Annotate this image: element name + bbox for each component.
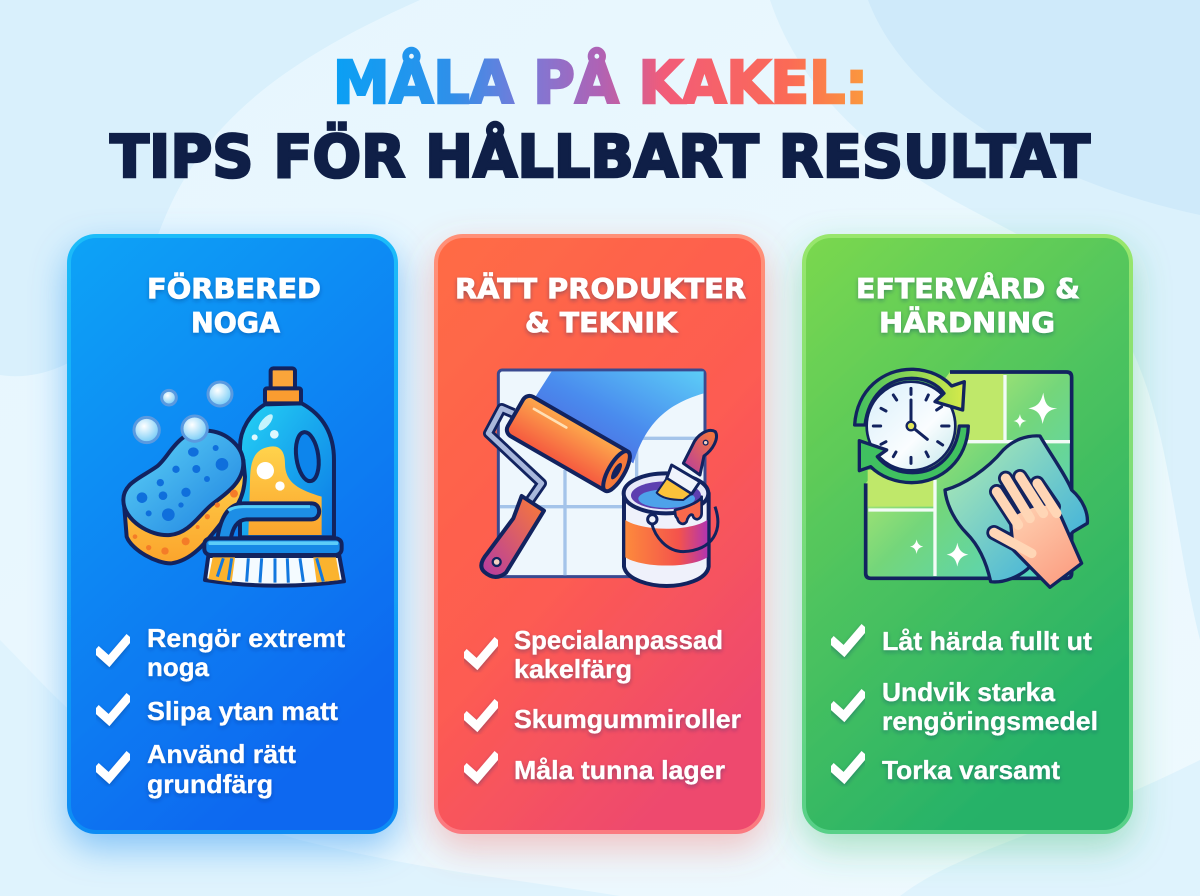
check item 1: Specialanpassad [514, 625, 723, 655]
check item 2: Slipa ytan matt [147, 696, 338, 726]
icon: roller, tile and paint can [481, 370, 718, 586]
icon part: clock [855, 369, 968, 483]
check item 2: Skumgummiroller [514, 704, 741, 734]
icon part: brush [204, 503, 344, 586]
list: rätt produkter [467, 625, 741, 785]
panel: förbered noga [69, 236, 396, 832]
icon part: sponge [123, 431, 245, 563]
heading: rätt produkter [455, 271, 746, 339]
heading: rätt produkter: RÄTT PRODUKTER [455, 271, 746, 305]
icon part: bubbles [134, 382, 232, 443]
heading: eftervård: HÄRDNING [879, 305, 1055, 339]
heading: rätt produkter: & TEKNIK [525, 306, 678, 339]
heading: eftervård [856, 271, 1080, 339]
icon part: bottle [240, 368, 334, 537]
title [110, 48, 1090, 191]
check item 2: rengöringsmedel [882, 706, 1098, 736]
check item 3: Måla tunna lager [514, 755, 725, 785]
icon part: paint can [624, 430, 718, 586]
check item 3 [99, 739, 296, 799]
list: eftervård [834, 626, 1098, 785]
check item 3: Använd rätt [147, 739, 296, 769]
check item 1 [467, 625, 723, 684]
heading: förbered noga [147, 271, 321, 339]
check item 2: Undvik starka [882, 677, 1056, 707]
heading: eftervård: EFTERVÅRD & [856, 271, 1080, 305]
check item 1: Låt härda fullt ut [882, 626, 1092, 656]
panel: eftervård och härdning [804, 236, 1131, 832]
icon part: tiles [866, 372, 1072, 578]
icon: cleaning supplies [123, 368, 344, 586]
icon part: tiles [498, 370, 705, 577]
check item 3: Torka varsamt [882, 755, 1060, 785]
list: förbered noga [99, 623, 345, 799]
icon part: cloth [945, 436, 1087, 582]
title line 2: TIPS FÖR HÅLLBART RESULTAT [110, 122, 1090, 191]
check item 3: grundfärg [147, 769, 273, 799]
check item 1: Rengör extremt [147, 623, 345, 653]
icon part: roller [481, 393, 635, 577]
check item 2 [834, 677, 1098, 736]
check item 1 [99, 623, 345, 682]
check item 1: kakelfärg [514, 654, 632, 684]
icon part: paint brush [657, 430, 716, 500]
panel: rätt produkter och teknik [436, 236, 763, 832]
title line 1: MÅLA PÅ KAKEL: [333, 48, 868, 117]
heading: förbered noga: FÖRBERED [147, 271, 321, 305]
icon: clock, tile and cloth [855, 369, 1087, 587]
icon part: hand [994, 477, 1082, 587]
heading: förbered noga: NOGA [191, 306, 280, 339]
check item 1: noga [147, 652, 210, 682]
